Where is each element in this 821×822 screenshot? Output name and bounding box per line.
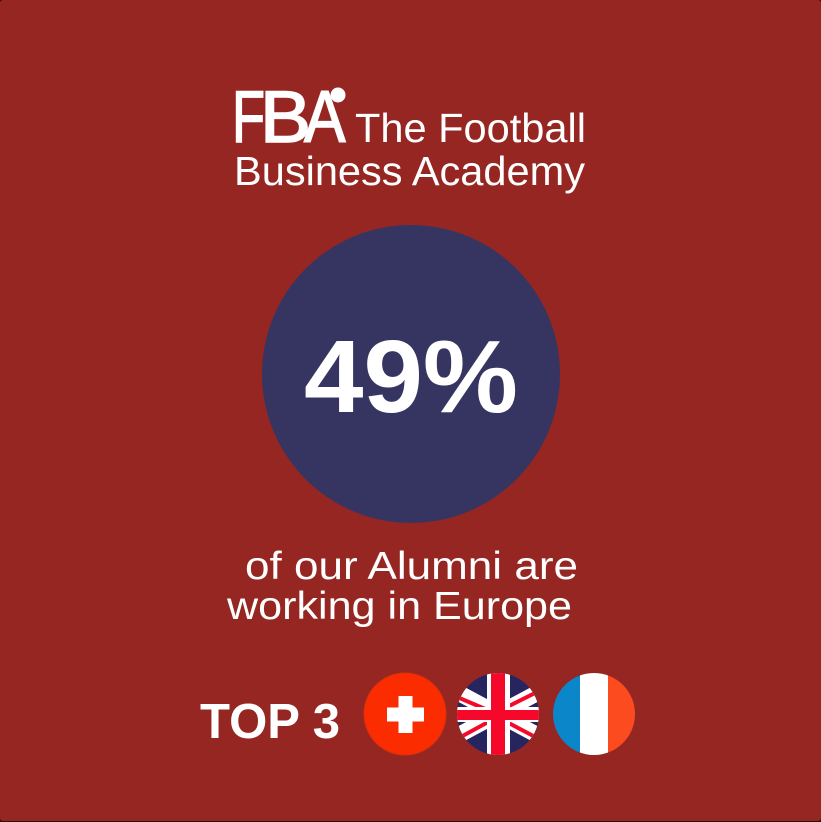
logo mark: FBA [232,77,346,158]
logo mark: FBA: F [232,77,265,158]
logo text: The Football: The Football [355,105,586,151]
logo text: Business Academy: Business Academy [234,148,585,194]
icon: UK flag [457,673,539,755]
logo mark: FBA: A [304,77,346,158]
caption [226,545,578,628]
statistic value: 49% [304,319,518,434]
icon: French flag [553,673,636,755]
caption: of our Alumni are [245,545,578,588]
top 3 label: TOP 3 [200,695,340,749]
logo mark: FBA: B [260,77,311,158]
statistic circle [262,225,560,523]
logo: The Football Business Academy [232,77,586,194]
icon: Swiss flag [364,673,446,755]
caption: working in Europe [226,585,572,628]
